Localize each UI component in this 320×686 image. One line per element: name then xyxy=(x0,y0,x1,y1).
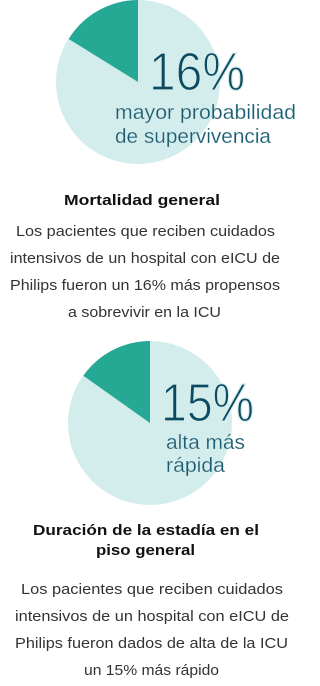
body text: un 15% más rápido xyxy=(84,662,219,679)
body text xyxy=(10,223,280,321)
panel: length of stay xyxy=(15,341,289,679)
heading: piso general xyxy=(96,542,195,559)
body text: intensivos de un hospital con eICU de xyxy=(15,608,289,625)
body text: intensivos de un hospital con eICU de xyxy=(10,250,280,267)
body text: Los pacientes que reciben cuidados xyxy=(16,223,275,240)
heading: Mortalidad general xyxy=(64,192,220,209)
body text: Philips fueron dados de alta de la ICU xyxy=(15,635,288,652)
stat label xyxy=(115,102,296,148)
body text: a sobrevivir en la ICU xyxy=(68,304,221,321)
stat label xyxy=(166,432,245,477)
heading xyxy=(33,522,259,559)
body text: Los pacientes que reciben cuidados xyxy=(21,581,283,598)
stat label: mayor probabilidad xyxy=(115,102,296,124)
body text: Philips fueron un 16% más propensos xyxy=(10,277,280,294)
stat: 16%: 16% xyxy=(149,42,245,102)
stat label: rápida xyxy=(166,455,226,477)
stat label: alta más xyxy=(166,432,245,454)
stat label: de supervivencia xyxy=(115,126,272,148)
heading: Duración de la estadía en el xyxy=(33,522,259,539)
stat: 15%: 15% xyxy=(161,373,254,433)
pie chart: 16% xyxy=(56,0,220,164)
panel: overall mortality xyxy=(10,0,296,321)
body text xyxy=(15,581,289,679)
pie chart: 15% xyxy=(68,341,232,505)
